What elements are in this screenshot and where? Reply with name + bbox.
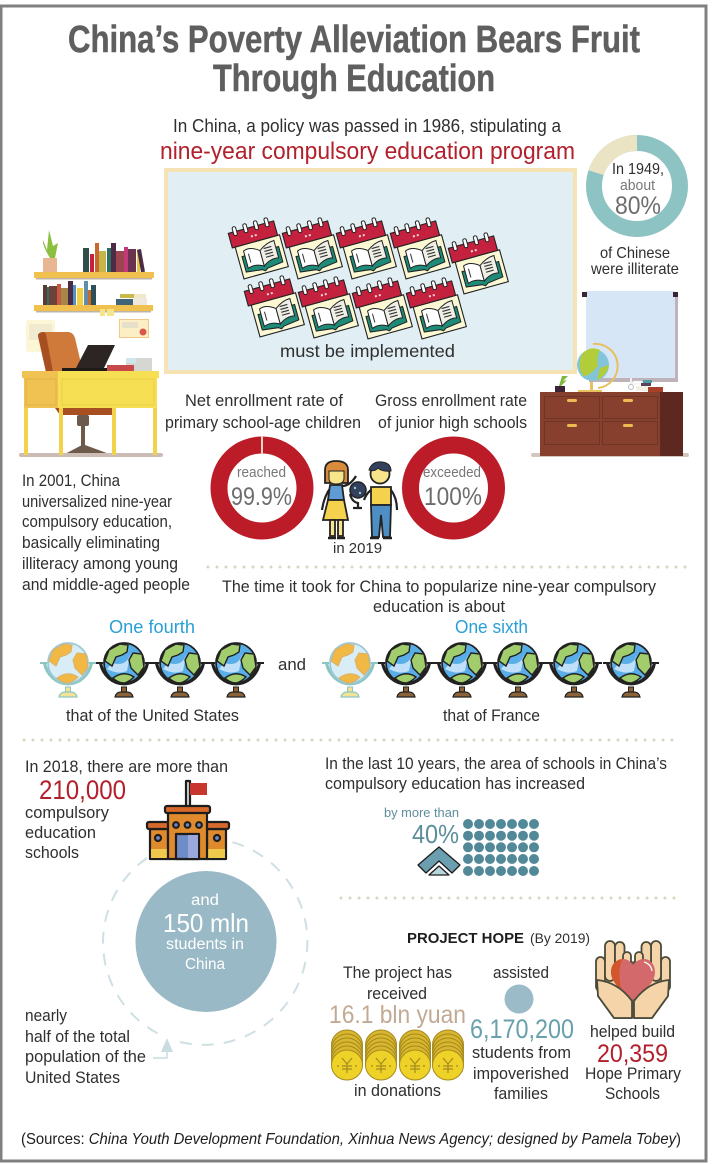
donut: exceeded 100%: exceeded — [423, 465, 481, 481]
donut: 80% illiterate in 1949: In 1949, — [612, 161, 664, 178]
circle: 150 mln students: and — [191, 892, 219, 909]
text: nearly half of US population — [25, 1007, 146, 1087]
column: schools built: helped build — [590, 1023, 675, 1041]
text: 210,000 compulsory education schools: In 2018, there are more than — [25, 758, 228, 776]
circle: 150 mln students: 150 mln — [163, 908, 249, 938]
heading: net enrollment rate — [165, 392, 361, 432]
text: of Chinese were illiterate: of Chinese — [600, 245, 670, 262]
column: schools built — [585, 1023, 682, 1103]
title — [68, 19, 640, 100]
connector word: and: and — [278, 656, 306, 674]
text: of Chinese were illiterate: were illiterate — [590, 261, 679, 278]
column: students assisted: families — [494, 1085, 548, 1103]
stat: by more than 40%: 40% — [412, 819, 459, 849]
text: 210,000 compulsory education schools: education — [25, 824, 96, 842]
donut: exceeded 100% — [410, 445, 496, 531]
donut: 80% illiterate in 1949 — [594, 143, 680, 229]
text: 210,000 compulsory education schools — [25, 758, 228, 862]
text: area of schools increased — [325, 755, 667, 793]
column: students assisted: students from — [472, 1044, 571, 1062]
icons: calendars with books — [227, 216, 508, 340]
column: students assisted — [470, 964, 574, 1103]
icon: coin stacks — [332, 1030, 464, 1080]
column: schools built: Hope Primary — [585, 1065, 682, 1083]
donut: 80% illiterate in 1949: about — [620, 177, 656, 194]
comparison: one fourth: One fourth — [109, 617, 195, 637]
stat: by more than 40%: by more than — [384, 805, 459, 820]
arrow: from text to orbit — [153, 1038, 173, 1058]
text block: universalized education in 2001: basically eliminating — [22, 534, 160, 552]
stat: by more than 40% — [384, 805, 539, 876]
text: nearly half of US population: nearly — [25, 1007, 68, 1025]
heading: gross enrollment rate: Gross enrollment rate — [375, 392, 527, 410]
text: time to popularize education: The time it took for China to popularize nine-year compulsory — [222, 578, 657, 596]
icons: six globes — [322, 643, 659, 697]
text: nearly half of US population: population of the — [25, 1048, 146, 1066]
text: time to popularize education: education is about — [373, 598, 505, 616]
icon: school building — [147, 781, 229, 859]
donut: 80% illiterate in 1949: 80% — [615, 192, 661, 220]
comparison: one sixth: One sixth — [455, 617, 528, 637]
text: 210,000 compulsory education schools: schools — [25, 844, 79, 862]
text block: universalized education in 2001: universalized nine-year — [22, 493, 172, 511]
text: area of schools increased: In the last 10 years, the area of schools in China’s — [325, 755, 667, 773]
red highlight: nine-year compulsory education program: nine-year compulsory education program — [160, 138, 575, 165]
column: donations: in donations — [354, 1082, 441, 1100]
comparison: one sixth — [322, 617, 659, 725]
heading: net enrollment rate: primary school-age children — [165, 414, 361, 432]
icon: up chevrons — [418, 847, 460, 875]
comparison: one fourth: that of the United States — [66, 707, 239, 725]
column: students assisted: assisted — [493, 964, 549, 982]
heading: gross enrollment rate — [375, 392, 527, 432]
text: nearly half of US population: half of the total — [25, 1028, 130, 1046]
label: in 2019: in 2019 — [333, 540, 382, 557]
text: nearly half of US population: United States — [25, 1069, 120, 1087]
text block: universalized education in 2001: In 2001, China — [22, 472, 121, 490]
text: area of schools increased: compulsory education has increased — [325, 775, 585, 793]
donut: exceeded 100%: 100% — [424, 483, 482, 511]
donut: reached 99.9%: 99.9% — [231, 483, 292, 511]
text block: universalized education in 2001: and middle-aged people — [22, 576, 190, 594]
circle: 150 mln students — [136, 871, 276, 1012]
dashed orbit circle — [103, 841, 307, 1045]
text block: universalized education in 2001: compulsory education, — [22, 513, 172, 531]
donut: reached 99.9%: reached — [237, 465, 286, 481]
column: donations: 16.1 bln yuan — [329, 1001, 466, 1029]
caption: must be implemented: must be implemented — [280, 341, 455, 361]
text: 210,000 compulsory education schools: compulsory — [25, 804, 110, 822]
column: schools built: 20,359 — [597, 1040, 668, 1068]
icons: four globes — [40, 643, 264, 697]
heading: Project Hope — [407, 930, 590, 947]
panel: compulsory education calendars — [166, 170, 575, 372]
illustration: study desk and bookshelves — [19, 230, 163, 457]
intro text: In China, a policy was passed in 1986, stipulating a — [173, 115, 562, 136]
circle: 150 mln students: students in — [166, 936, 244, 953]
column: students assisted: 6,170,200 — [470, 1014, 574, 1044]
heading: net enrollment rate: Net enrollment rate of — [185, 392, 343, 410]
donut: reached 99.9% — [219, 436, 305, 531]
icon: children with globe — [322, 461, 397, 538]
text block: universalized education in 2001 — [22, 472, 190, 594]
text: 210,000 compulsory education schools: 210,000 — [39, 775, 126, 805]
dot grid — [463, 819, 539, 876]
heading: Project Hope: (By 2019) — [530, 930, 590, 946]
column: donations: The project has — [343, 964, 452, 982]
sources line: (Sources: China Youth Development Foundation, Xinhua News Agency; designed by Pamela Tobey) — [21, 1131, 681, 1148]
icon: hands holding heart — [596, 941, 670, 1018]
text block: universalized education in 2001: illiteracy among young — [22, 555, 178, 573]
text: of Chinese were illiterate — [590, 245, 679, 278]
text: time to popularize education — [222, 578, 657, 616]
comparison: one fourth — [40, 617, 264, 725]
column: donations: received — [367, 985, 427, 1003]
column: students assisted: impoverished — [473, 1065, 569, 1083]
heading: Project Hope: PROJECT HOPE — [407, 930, 524, 947]
circle: 150 mln students: China — [185, 956, 225, 973]
column: donations — [329, 964, 466, 1100]
comparison: one sixth: that of France — [443, 707, 540, 725]
illustration: whiteboard, globe and cabinet — [531, 291, 689, 457]
column: schools built: Schools — [605, 1085, 660, 1103]
heading: gross enrollment rate: of junior high schools — [378, 414, 527, 432]
title: Through Education — [213, 58, 495, 100]
